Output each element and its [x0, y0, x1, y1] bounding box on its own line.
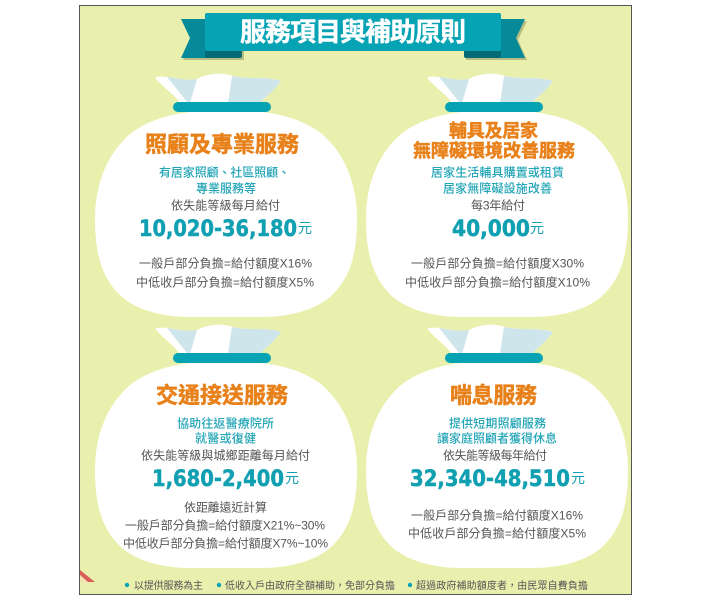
footer notes — [125, 579, 588, 592]
co-payment rates — [408, 508, 586, 540]
co-payment rates — [136, 256, 314, 290]
footer notes: 低收入戶由政府全額補助，免部分負擔 — [225, 579, 395, 592]
co-payment rates: 一般戶部分負擔=給付額度X16% — [139, 256, 312, 270]
description: 讓家庭照顧者獲得休息 — [437, 430, 557, 446]
amount: 元 — [285, 470, 299, 486]
description: 就醫或復健 — [195, 430, 256, 446]
amount: 元 — [571, 470, 585, 486]
amount: 元 — [530, 220, 544, 236]
payment basis: 依失能等級與城鄉距離每月給付 — [141, 448, 310, 462]
description: 提供短期照顧服務 — [449, 416, 546, 430]
co-payment rates: 一般戶部分負擔=給付額度X21%~30% — [125, 518, 325, 532]
amount: 元 — [298, 220, 312, 236]
icon: bag knot — [366, 325, 628, 568]
description: 專業服務等 — [196, 180, 256, 196]
amount: 10,020-36,180 — [139, 217, 297, 242]
icon: bag knot — [95, 74, 357, 317]
heading: 照顧及專業服務 — [145, 132, 299, 157]
heading: 喘息服務 — [450, 383, 537, 408]
co-payment rates: 一般戶部分負擔=給付額度X30% — [411, 256, 584, 270]
heading — [413, 120, 575, 161]
payment basis: 每3年給付 — [471, 198, 525, 212]
description: 有居家照顧、社區照顧、 — [159, 164, 290, 180]
heading: 無障礙環境改善服務 — [413, 140, 575, 161]
icon: bag knot — [95, 325, 357, 568]
heading: 交通接送服務 — [156, 383, 288, 408]
co-payment rates — [405, 256, 590, 290]
description: 居家無障礙設施改善 — [443, 180, 552, 196]
panel: transportation services — [95, 325, 357, 568]
co-payment rates: 中低收戶部分負擔=給付額度X10% — [405, 274, 590, 290]
footer notes: 以提供服務為主 — [134, 579, 203, 592]
description — [431, 164, 564, 196]
payment basis: 依失能等級每年給付 — [443, 448, 547, 462]
description — [437, 416, 557, 446]
description — [177, 416, 274, 446]
amount: 32,340-48,510 — [410, 467, 570, 492]
description: 協助往返醫療院所 — [177, 416, 274, 430]
panel: assistive devices and home accessibility — [366, 74, 628, 317]
heading: 輔具及居家 — [449, 120, 538, 141]
description: 居家生活輔具購置或租賃 — [431, 164, 564, 180]
heading: title: 服務項目與補助原則 — [240, 17, 466, 47]
co-payment rates: 一般戶部分負擔=給付額度X16% — [411, 508, 583, 522]
title ribbon — [181, 13, 527, 60]
decoration: corner fragment — [80, 570, 95, 583]
footer notes: 超過政府補助額度者，由民眾自費負擔 — [416, 579, 588, 592]
co-payment rates: 中低收戶部分負擔=給付額度X5% — [408, 526, 586, 540]
amount: 1,680-2,400 — [152, 467, 284, 492]
co-payment rates: 中低收戶部分負擔=給付額度X5% — [136, 274, 314, 290]
payment basis: 依失能等級每月給付 — [171, 198, 280, 212]
co-payment rates: 依距離遠近計算 — [184, 500, 267, 514]
description — [159, 164, 290, 196]
panel: care and professional services — [95, 74, 357, 317]
amount: 40,000 — [452, 217, 530, 242]
co-payment rates: 中低收戶部分負擔=給付額度X7%~10% — [123, 536, 328, 550]
icon: bag knot — [366, 74, 628, 317]
co-payment rates — [123, 500, 328, 550]
panel: background — [80, 6, 632, 594]
panel: respite services — [366, 325, 628, 568]
